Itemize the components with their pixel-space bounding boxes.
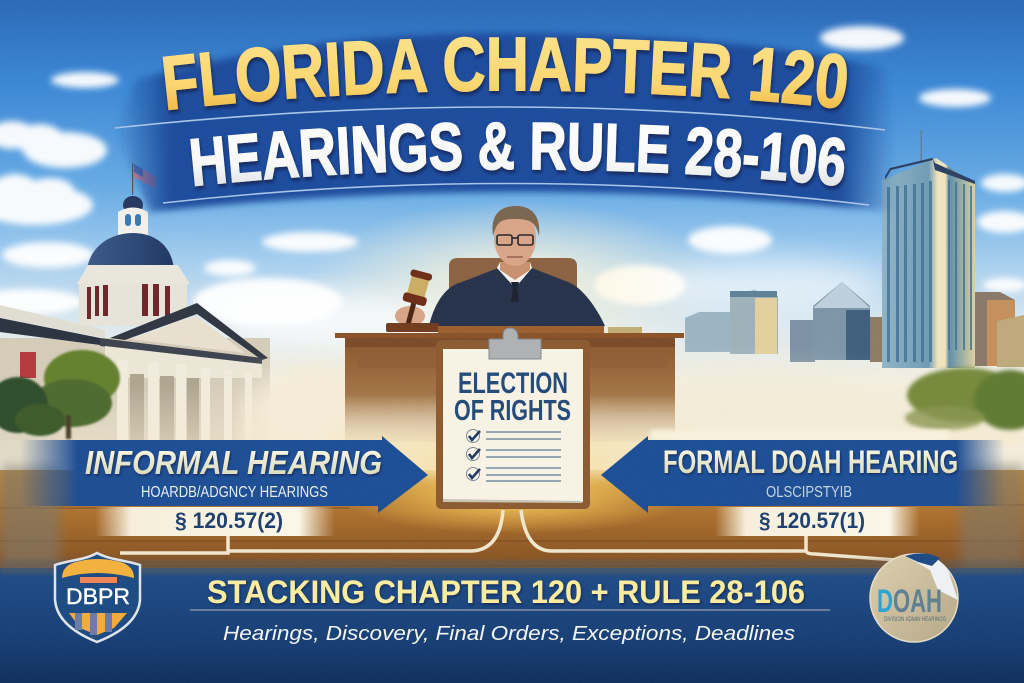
right statute label: § 120.57(1) <box>759 508 865 533</box>
DOAH seal: DIVISION ADMIN HEARINGS <box>884 617 946 623</box>
checklist <box>466 430 561 481</box>
wood table <box>0 423 1024 575</box>
right statute label <box>715 507 920 536</box>
DOAH seal: DOAH <box>877 583 942 619</box>
left statute label <box>95 507 335 536</box>
glasses <box>497 235 533 245</box>
DBPR shield <box>55 553 140 642</box>
flag <box>132 163 156 195</box>
mouth <box>507 256 523 258</box>
election of rights heading: OF RIGHTS <box>454 395 571 427</box>
trees <box>0 350 1024 439</box>
left arrow: informal hearing <box>20 436 428 513</box>
informal hearing heading: INFORMAL HEARING <box>85 444 382 481</box>
neck and face <box>500 262 530 280</box>
gavel and block <box>386 269 439 332</box>
hair <box>492 206 539 236</box>
capitol dome <box>77 196 190 326</box>
clipboard <box>436 328 590 509</box>
fog <box>0 365 1024 463</box>
bottom band background <box>0 560 1024 683</box>
robe <box>429 268 605 326</box>
election of rights heading: ELECTION <box>458 367 568 400</box>
banner rules <box>115 107 885 205</box>
chair <box>449 258 577 300</box>
tower <box>882 158 975 368</box>
DBPR shield: DBPR <box>66 584 130 609</box>
stacking heading: STACKING CHAPTER 120 + RULE 28-106 <box>207 574 805 610</box>
clipboard clip <box>489 328 541 359</box>
election of rights heading <box>454 367 571 427</box>
judge's bench <box>335 326 684 442</box>
title line 2: HEARINGS & RULE 28-106 <box>190 122 848 191</box>
banner <box>115 33 895 212</box>
collar and tie <box>497 262 532 288</box>
formal hearing subtext: OLSCIPSTYIB <box>766 484 852 501</box>
title line 1: FLORIDA CHAPTER 120 <box>162 36 850 115</box>
DOAH seal <box>870 553 958 642</box>
clouds <box>0 26 1024 370</box>
informal hearing subtext: HOARDB/ADGNCY HEARINGS <box>141 484 328 501</box>
left trees <box>0 350 120 439</box>
right trees <box>905 368 1024 430</box>
right skyline <box>685 130 1024 368</box>
capitol building <box>0 163 270 440</box>
left statute label: § 120.57(2) <box>175 508 283 533</box>
subheading: Hearings, Discovery, Final Orders, Exceptions, Deadlines <box>223 623 795 645</box>
judge <box>386 206 605 332</box>
right arrow: formal DOAH hearing <box>601 430 1005 513</box>
antenna <box>920 130 922 162</box>
skyline: background buildings <box>685 282 1024 367</box>
capitol wall and pediment <box>0 303 270 440</box>
connector lines <box>120 510 895 560</box>
